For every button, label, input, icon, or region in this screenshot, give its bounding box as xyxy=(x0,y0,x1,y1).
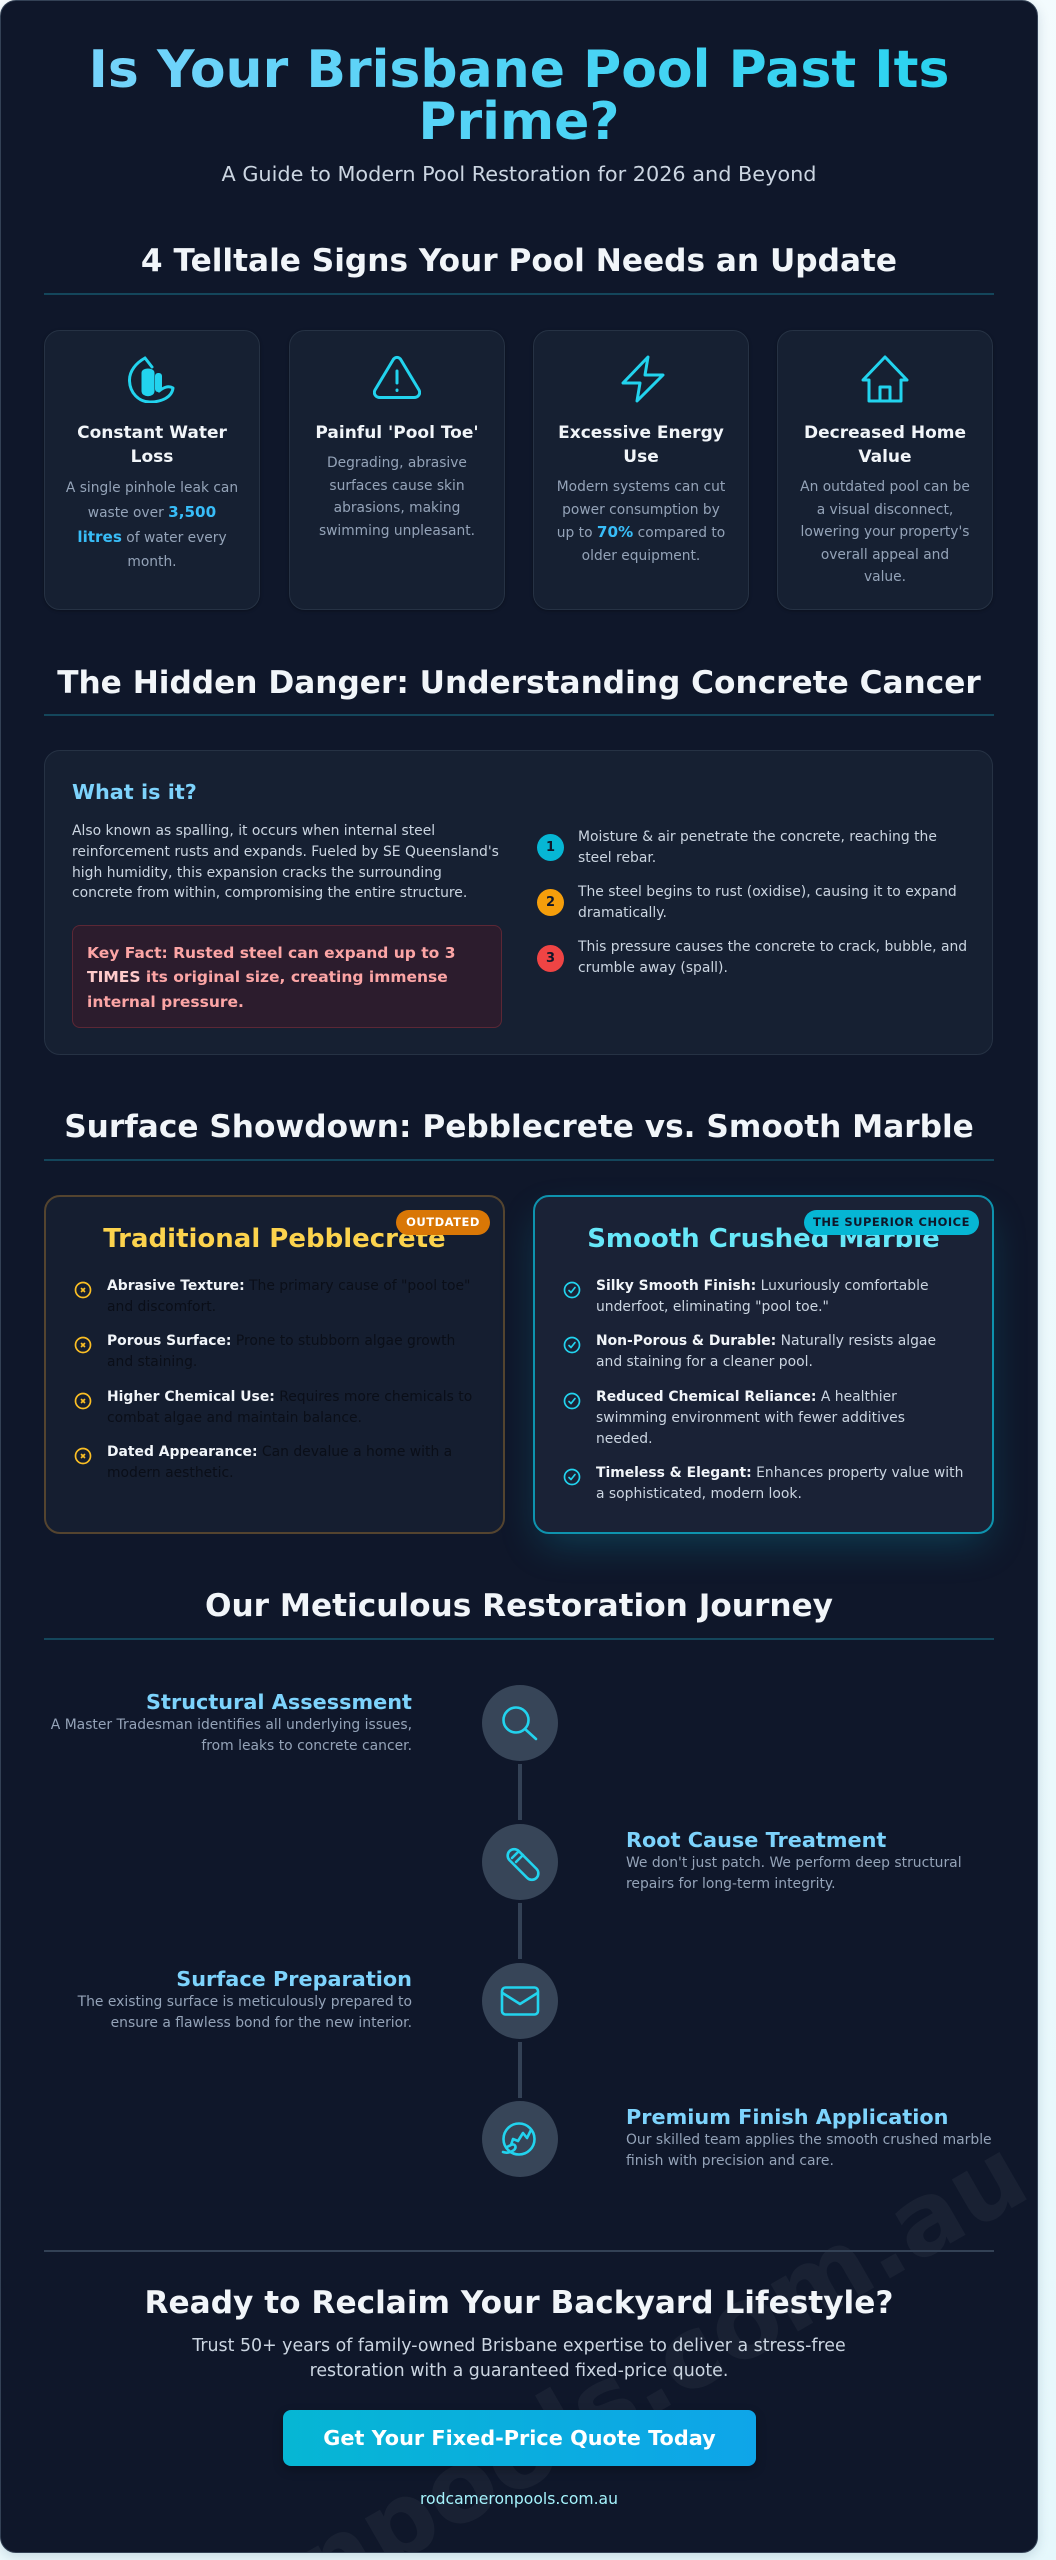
step text: treatment: Root Cause Treatment xyxy=(626,1828,886,1852)
con 2 xyxy=(74,1336,92,1354)
step 1 xyxy=(537,834,564,861)
cta text: restoration with a guaranteed fixed-price quote. xyxy=(310,2361,728,2381)
cta text xyxy=(192,2336,846,2381)
paragraph: Also known as spalling, it occurs when internal steel xyxy=(72,823,435,839)
pro 2 xyxy=(564,1336,580,1354)
icon: house xyxy=(862,355,909,402)
step node: assessment xyxy=(482,1685,558,1761)
panel: sign card 2 xyxy=(289,330,505,610)
step text: treatment: repairs for long-term integrity. xyxy=(626,1876,836,1892)
step 2: 2 xyxy=(546,895,555,910)
cta button: Get Your Fixed-Price Quote Today xyxy=(323,2426,716,2450)
card heading: Excessive Energy xyxy=(558,423,724,443)
con 3 xyxy=(74,1392,92,1410)
title: Is Your Brisbane Pool Past Its xyxy=(89,40,949,100)
pro 3 text: needed. xyxy=(596,1431,652,1447)
panel: concrete cancer xyxy=(44,750,993,1055)
card text: power consumption by xyxy=(562,502,720,518)
card text xyxy=(319,455,475,539)
badge: outdated: OUTDATED xyxy=(406,1215,480,1229)
panel: sign card 3 xyxy=(533,330,749,610)
card text: surfaces cause skin xyxy=(329,478,465,494)
card text: A single pinhole leak can xyxy=(66,480,238,496)
pro 2 text: and staining for a cleaner pool. xyxy=(596,1354,813,1370)
card heading xyxy=(558,423,724,467)
card heading xyxy=(804,423,966,467)
step node: treatment xyxy=(482,1824,558,1900)
step 1 text: Moisture & air penetrate the concrete, reaching the xyxy=(578,829,937,845)
panel: traditional pebblecrete xyxy=(44,1195,505,1534)
pro 4 text: Timeless & Elegant: Enhances property value with xyxy=(596,1465,963,1481)
step 2 text: dramatically. xyxy=(578,905,667,921)
card text: Modern systems can cut xyxy=(557,479,725,495)
pro 3 text: swimming environment with fewer additives xyxy=(596,1410,905,1426)
icon: lightning bolt xyxy=(621,356,665,402)
con 4 text xyxy=(107,1444,452,1481)
step 1: 1 xyxy=(546,840,555,855)
title: Prime? xyxy=(418,92,620,152)
step 2 text: The steel begins to rust (oxidise), causing it to expand xyxy=(578,884,957,900)
card text: waste over 3,500 xyxy=(88,503,216,521)
card text: An outdated pool can be xyxy=(800,479,970,495)
card heading: Decreased Home xyxy=(804,423,966,443)
pro 2 text xyxy=(596,1333,936,1370)
subheading: What is it? xyxy=(72,780,197,804)
card text: older equipment. xyxy=(582,548,700,564)
card text: overall appeal and xyxy=(821,547,949,563)
cta text: Trust 50+ years of family-owned Brisbane expertise to deliver a stress-free xyxy=(192,2336,846,2356)
pro 4 text xyxy=(596,1465,963,1502)
panel: smooth crushed marble xyxy=(533,1195,994,1534)
con 4 xyxy=(74,1448,92,1464)
con 2 text xyxy=(107,1333,455,1370)
card heading: Constant Water xyxy=(77,423,227,443)
panel: sign card 1 xyxy=(44,330,260,610)
con 4 text: modern aesthetic. xyxy=(107,1465,234,1481)
card heading: Loss xyxy=(131,447,173,467)
pro 3 xyxy=(564,1392,580,1410)
step 3 text xyxy=(578,939,967,976)
card text: lowering your property's xyxy=(801,524,969,540)
step 2 text xyxy=(578,884,957,921)
card text: swimming unpleasant. xyxy=(319,523,475,539)
step 3 text: This pressure causes the concrete to crack, bubble, and xyxy=(578,939,967,955)
pro 1 text: Silky Smooth Finish: Luxuriously comfortable xyxy=(596,1278,928,1294)
pro 1 text xyxy=(596,1278,928,1315)
heading: surface showdown: Surface Showdown: Pebblecrete vs. Smooth Marble xyxy=(64,1109,974,1145)
paragraph: reinforcement rusts and expands. Fueled by SE Queensland's xyxy=(72,844,499,860)
heading: concrete cancer: The Hidden Danger: Understanding Concrete Cancer xyxy=(57,665,981,701)
card text: up to 70% compared to xyxy=(557,523,725,541)
paragraph: concrete from within, compromising the entire structure. xyxy=(72,885,467,901)
card text: month. xyxy=(127,554,177,570)
step text: preparation: Surface Preparation xyxy=(176,1967,412,1991)
callout: key fact: TIMES its original size, creating immense xyxy=(87,968,448,986)
step text: assessment: Structural Assessment xyxy=(146,1690,412,1714)
con 1 text: and discomfort. xyxy=(107,1299,216,1315)
step text: assessment xyxy=(50,1690,412,1754)
con 2 text: Porous Surface: Prone to stubborn algae growth xyxy=(107,1333,455,1349)
badge: superior choice xyxy=(804,1210,979,1235)
card text xyxy=(557,479,725,564)
pro 3 text xyxy=(596,1389,905,1447)
heading: telltale signs: 4 Telltale Signs Your Pool Needs an Update xyxy=(141,243,897,279)
step 3 xyxy=(537,945,564,972)
card heading: Use xyxy=(623,447,659,467)
card text: litres of water every xyxy=(77,528,227,546)
callout: key fact: internal pressure. xyxy=(87,993,244,1011)
card heading xyxy=(77,423,227,467)
con 1 text: Abrasive Texture: The primary cause of "pool toe" xyxy=(107,1278,470,1294)
pro 2 text: Non-Porous & Durable: Naturally resists algae xyxy=(596,1333,936,1349)
card heading: Value xyxy=(858,447,912,467)
pro 4 text: a sophisticated, modern look. xyxy=(596,1486,802,1502)
subtitle: A Guide to Modern Pool Restoration for 2026 and Beyond xyxy=(221,162,816,186)
step 1 text: steel rebar. xyxy=(578,850,656,866)
step text: treatment xyxy=(626,1828,962,1892)
pro 1 xyxy=(564,1282,580,1298)
pro 4 xyxy=(564,1468,580,1486)
step text: finish xyxy=(626,2105,992,2169)
callout: key fact xyxy=(72,925,502,1028)
card text: value. xyxy=(864,569,906,585)
step 3 text: crumble away (spall). xyxy=(578,960,728,976)
pro 1 text: underfoot, eliminating "pool toe." xyxy=(596,1299,829,1315)
card text xyxy=(66,480,238,570)
paragraph: high humidity, this expansion cracks the surrounding xyxy=(72,865,442,881)
step 1 text xyxy=(578,829,937,866)
callout: key fact: Key Fact: Rusted steel can expand up to 3 xyxy=(87,944,456,962)
pro 3 text: Reduced Chemical Reliance: A healthier xyxy=(596,1389,897,1405)
step text: assessment: from leaks to concrete cancer. xyxy=(201,1738,412,1754)
step 3: 3 xyxy=(546,951,555,966)
panel: sign card 4 xyxy=(777,330,993,610)
step node: finish xyxy=(482,2101,558,2177)
step text: assessment: A Master Tradesman identifies all underlying issues, xyxy=(51,1717,412,1733)
step text: preparation xyxy=(78,1967,412,2031)
step text: treatment: We don't just patch. We perform deep structural xyxy=(626,1855,962,1871)
icon: warning triangle xyxy=(373,356,421,399)
panel title: Smooth Crushed Marble xyxy=(587,1224,940,1254)
title xyxy=(1,44,1037,148)
step text: finish: finish with precision and care. xyxy=(626,2153,834,2169)
step node: preparation xyxy=(482,1963,558,2039)
card text: Degrading, abrasive xyxy=(327,455,467,471)
con 2 text: and staining. xyxy=(107,1354,197,1370)
card text: a visual disconnect, xyxy=(817,502,953,518)
heading: restoration journey: Our Meticulous Restoration Journey xyxy=(205,1588,833,1624)
card text xyxy=(800,479,970,585)
step text: preparation: ensure a flawless bond for the new interior. xyxy=(111,2015,412,2031)
con 1 text xyxy=(107,1278,470,1315)
step text: finish: Our skilled team applies the smooth crushed marble xyxy=(626,2132,992,2148)
con 3 text: combat algae and maintain balance. xyxy=(107,1410,362,1426)
step text: preparation: The existing surface is meticulously prepared to xyxy=(78,1994,412,2010)
badge: superior choice: THE SUPERIOR CHOICE xyxy=(813,1215,970,1229)
paragraph xyxy=(72,823,499,901)
con 4 text: Dated Appearance: Can devalue a home with a xyxy=(107,1444,452,1460)
card heading: Painful 'Pool Toe' xyxy=(315,423,479,443)
panel title: Traditional Pebblecrete xyxy=(103,1224,446,1254)
step 2 xyxy=(537,889,564,916)
cta heading: Ready to Reclaim Your Backyard Lifestyle? xyxy=(145,2285,893,2321)
badge: outdated xyxy=(396,1210,490,1235)
con 3 text: Higher Chemical Use: Requires more chemicals to xyxy=(107,1389,472,1405)
con 3 text xyxy=(107,1389,472,1426)
icon: water loss xyxy=(128,356,174,403)
cta button xyxy=(283,2410,756,2466)
footer url: rodcameronpools.com.au xyxy=(420,2490,618,2508)
step text: finish: Premium Finish Application xyxy=(626,2105,948,2129)
card text: abrasions, making xyxy=(334,500,460,516)
con 1 xyxy=(74,1282,92,1298)
